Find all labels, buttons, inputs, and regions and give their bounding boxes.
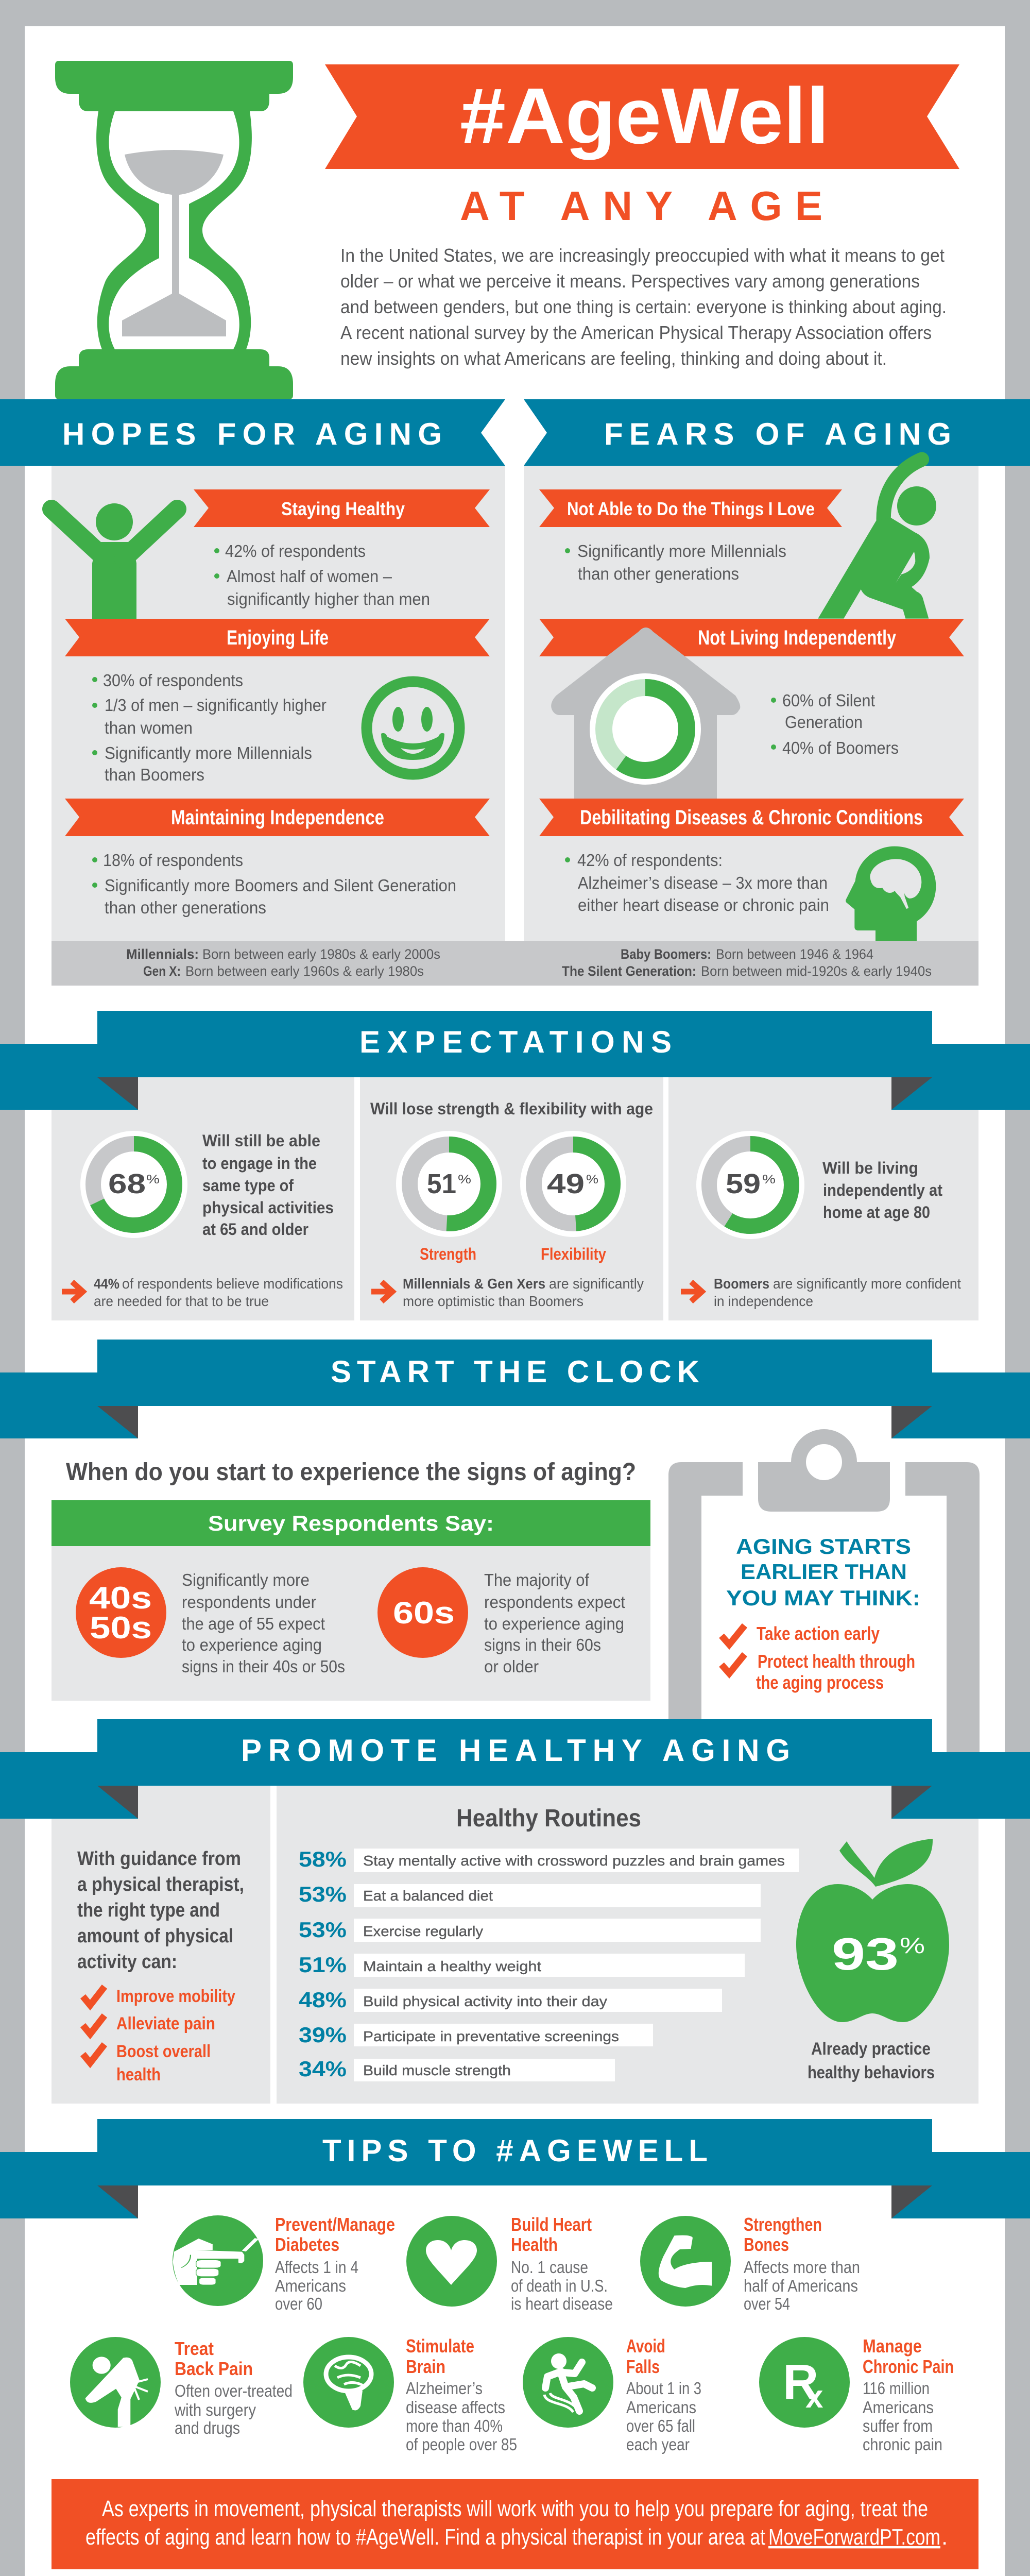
banner: fears of aging: FEARS OF AGING	[604, 417, 951, 451]
panel: expectations strength and flexibility: Millennials & Gen Xers	[403, 1276, 545, 1292]
call to action: MoveForwardPT.com	[768, 2524, 940, 2550]
survey panel: The majority of	[484, 1570, 590, 1589]
generation definitions strip: Born between early 1960s & early 1980s	[185, 963, 424, 979]
banner: start the clock	[0, 1340, 1030, 1438]
panel: physical therapist benefits: With guidance from	[77, 1848, 241, 1870]
intro paragraph: and between genders, but one thing is certain: everyone is thinking about aging.	[340, 296, 947, 317]
tip: strengthen bones: Affects more than	[744, 2258, 860, 2277]
panel: expectations 68%: at 65 and older	[202, 1220, 308, 1239]
tip: diabetes: Diabetes	[275, 2234, 339, 2255]
tip: manage chronic pain: x	[805, 2379, 823, 2415]
section: fear — not living independently: Not Living Independently	[698, 626, 897, 649]
tip: stimulate brain: Stimulate	[406, 2335, 474, 2357]
panel: physical therapist benefits: health	[116, 2065, 161, 2084]
tip: back pain	[70, 2337, 293, 2437]
panel: expectations 68%: are needed for that to be true	[94, 1293, 269, 1309]
section: fear — debilitating diseases: Debilitating Diseases & Chronic Conditions	[580, 806, 923, 829]
generation definitions strip	[52, 941, 978, 986]
panel: expectations 68%: %	[146, 1173, 160, 1187]
tip: back pain: with surgery	[174, 2400, 256, 2419]
section: hope — enjoying life: 30% of respondents	[103, 671, 243, 690]
panel: expectations strength and flexibility: Will lose strength & flexibility with age	[370, 1099, 653, 1118]
icon: hourglass	[55, 61, 293, 399]
tip: manage chronic pain: Chronic Pain	[863, 2356, 954, 2377]
clipboard callout: EARLIER THAN	[741, 1560, 907, 1584]
section: hope — maintaining independence	[65, 799, 490, 917]
tip: avoid falls	[523, 2335, 701, 2454]
call to action: effects of aging and learn how to #AgeWell. Find a physical therapist in your area at	[85, 2524, 765, 2550]
tip: strengthen bones: over 54	[744, 2294, 790, 2313]
panel: healthy routines bar chart: Stay mentally active with crossword puzzles and brain games	[363, 1853, 785, 1869]
section: fear — not able to do things	[539, 489, 842, 583]
tip: manage chronic pain: chronic pain	[863, 2435, 942, 2454]
generation definitions strip: The Silent Generation:	[562, 963, 696, 979]
banner: start the clock: START THE CLOCK	[331, 1354, 699, 1389]
banner: hopes for aging	[0, 399, 505, 466]
tip: avoid falls: each year	[626, 2435, 690, 2454]
section: hope — staying healthy: Staying Healthy	[281, 498, 405, 519]
panel: healthy routines bar chart: Maintain a healthy weight	[363, 1958, 541, 1974]
tip: manage chronic pain: 116 million	[863, 2379, 930, 2398]
panel: expectations 59%: %	[762, 1173, 776, 1187]
tip: stimulate brain: disease affects	[406, 2398, 505, 2417]
icon: apple 93%: %	[900, 1933, 925, 1958]
panel: physical therapist benefits: Boost overall	[116, 2042, 211, 2061]
panel: expectations strength and flexibility: %	[586, 1173, 598, 1187]
panel: healthy routines bar chart: 53%	[299, 1918, 347, 1942]
section: hope — maintaining independence: Significantly more Boomers and Silent Generation	[105, 876, 456, 895]
section: hope — enjoying life: than women	[105, 718, 193, 737]
banner: promote healthy aging	[0, 1719, 1030, 1819]
tip: strengthen bones: Bones	[744, 2234, 789, 2255]
banner: fears of aging	[524, 399, 1030, 466]
tip: avoid falls: Falls	[626, 2356, 660, 2377]
tip: diabetes: over 60	[275, 2294, 322, 2313]
tip: avoid falls: Avoid	[626, 2335, 665, 2357]
tip: manage chronic pain	[759, 2335, 954, 2454]
tip: stimulate brain: Alzheimer’s	[406, 2379, 483, 2398]
section: hope — maintaining independence: Maintaining Independence	[171, 806, 384, 829]
section: hope — enjoying life	[65, 619, 490, 784]
intro paragraph: A recent national survey by the American Physical Therapy Association offers	[340, 322, 932, 343]
panel: healthy routines bar chart: Healthy Routines	[456, 1805, 641, 1832]
generation definitions strip: Born between mid-1920s & early 1940s	[701, 963, 932, 979]
section: hope — staying healthy: significantly higher than men	[227, 589, 430, 608]
tip: stimulate brain: Brain	[406, 2356, 445, 2377]
generation definitions strip: Born between 1946 & 1964	[716, 946, 873, 962]
panel: healthy routines bar chart: Build muscle strength	[363, 2062, 511, 2078]
tip: avoid falls: over 65 fall	[626, 2416, 695, 2435]
survey panel: to experience aging	[484, 1614, 624, 1633]
panel: physical therapist benefits: Improve mobility	[116, 1987, 235, 2006]
panel: physical therapist benefits	[52, 1786, 270, 2104]
panel: expectations 68%: physical activities	[202, 1198, 334, 1217]
panel: expectations 59%: 59	[726, 1168, 761, 1199]
section: hope — staying healthy: 42% of respondents	[225, 541, 366, 561]
icon: apple 93%	[796, 1839, 949, 2022]
section: fear — not able to do things: Significantly more Millennials	[577, 541, 786, 561]
panel: expectations strength and flexibility: Strength	[420, 1245, 476, 1263]
title ribbon: #AgeWell	[325, 64, 959, 169]
panel: expectations 59%	[668, 1077, 978, 1320]
section: fear — not able to do things: Not Able to Do the Things I Love	[567, 498, 815, 519]
panel: physical therapist benefits: activity can:	[77, 1951, 177, 1973]
section: hope — staying healthy	[194, 489, 490, 608]
icon: smiley face	[367, 682, 459, 774]
subtitle: at any age: AT ANY AGE	[460, 183, 822, 229]
section: fear — not able to do things: than other generations	[578, 564, 739, 583]
survey panel	[52, 1500, 650, 1701]
title ribbon: #AgeWell: #AgeWell	[460, 72, 829, 160]
tip: heart health: Health	[511, 2234, 558, 2255]
panel: healthy routines bar chart	[277, 1786, 978, 2104]
tip: avoid falls: Americans	[626, 2398, 696, 2417]
panel: healthy routines bar chart: 48%	[299, 1988, 347, 2012]
intro paragraph: new insights on what Americans are feeling, thinking and doing about it.	[340, 348, 887, 369]
banner: promote healthy aging: PROMOTE HEALTHY AGING	[241, 1733, 790, 1768]
section: fear — not living independently: 60% of Silent	[782, 691, 875, 710]
panel: expectations 59%: home at age 80	[823, 1203, 930, 1222]
caption: already practice healthy behaviors: healthy behaviors	[808, 2063, 935, 2082]
survey panel: Survey Respondents Say:	[208, 1511, 494, 1535]
tip: heart health	[406, 2214, 613, 2313]
caption: already practice healthy behaviors	[808, 2039, 935, 2082]
section: hope — staying healthy: Almost half of women –	[227, 567, 392, 586]
panel: expectations 59%: Boomers	[714, 1276, 769, 1292]
panel: healthy routines bar chart: Build physical activity into their day	[363, 1993, 607, 2009]
panel: expectations 68%: 44%	[94, 1276, 119, 1292]
panel: healthy routines bar chart: 58%	[299, 1847, 347, 1871]
tip: heart health: Build Heart	[511, 2214, 592, 2235]
panel: expectations 59%: are significantly more confident	[773, 1276, 961, 1292]
panel: expectations strength and flexibility	[360, 1077, 663, 1320]
tip: diabetes	[173, 2214, 395, 2313]
section: hope — enjoying life: Significantly more Millennials	[105, 743, 312, 762]
clipboard callout: YOU MAY THINK:	[726, 1586, 920, 1610]
clipboard callout: the aging process	[756, 1672, 884, 1693]
icon: stretching person	[818, 460, 936, 619]
section: hope — enjoying life: Enjoying Life	[227, 626, 329, 649]
panel: healthy routines bar chart: Eat a balanced diet	[363, 1888, 493, 1904]
panel: expectations 68%	[52, 1077, 354, 1320]
section: fear — not living independently: 40% of Boomers	[782, 738, 899, 757]
tip: diabetes: Affects 1 in 4	[275, 2258, 358, 2277]
banner: tips to #agewell	[0, 2119, 1030, 2218]
section: fear — not living independently: Generation	[785, 713, 863, 732]
tip: diabetes: Prevent/Manage	[275, 2214, 395, 2235]
panel: healthy routines bar chart: Participate in preventative screenings	[363, 2028, 619, 2044]
tip: heart health: of death in U.S.	[511, 2276, 608, 2295]
icon: person with raised arms	[52, 503, 177, 619]
tip: back pain: Often over-treated	[175, 2381, 293, 2400]
panel: healthy routines bar chart: 53%	[299, 1882, 347, 1906]
icon: head with brain	[846, 846, 936, 941]
icon: house with 60% donut	[551, 628, 740, 799]
panel: expectations strength and flexibility: more optimistic than Boomers	[403, 1293, 583, 1309]
tip: manage chronic pain: R	[783, 2354, 818, 2410]
section: fear — debilitating diseases: either heart disease or chronic pain	[578, 895, 829, 914]
tip: heart health: No. 1 cause	[511, 2258, 588, 2277]
section: fear — not living independently	[539, 619, 964, 757]
caption: already practice healthy behaviors: Already practice	[811, 2039, 931, 2059]
icon: apple 93%: 93	[832, 1928, 899, 1979]
tip: diabetes: Americans	[275, 2276, 346, 2295]
panel: hopes for aging background	[52, 466, 505, 941]
call to action: .	[941, 2524, 948, 2550]
panel: fears of aging background	[524, 466, 978, 941]
survey panel: respondents under	[182, 1592, 316, 1612]
panel: healthy routines bar chart: Exercise regularly	[363, 1923, 483, 1939]
panel: expectations strength and flexibility: 49	[547, 1168, 585, 1199]
section: hope — enjoying life: 1/3 of men – significantly higher	[105, 696, 327, 715]
tip: avoid falls: About 1 in 3	[626, 2379, 701, 2398]
intro paragraph: older – or what we perceive it means. Perspectives vary among generations	[340, 270, 920, 292]
banner: expectations	[0, 1011, 1030, 1110]
survey panel: to experience aging	[182, 1635, 322, 1654]
call to action	[52, 2479, 978, 2569]
panel: healthy routines bar chart: 51%	[299, 1953, 347, 1977]
section: hope — maintaining independence: than other generations	[105, 898, 266, 917]
tip: manage chronic pain: suffer from	[863, 2416, 933, 2435]
survey panel: or older	[484, 1657, 539, 1676]
panel: expectations 59%: Will be living	[822, 1159, 918, 1177]
panel: expectations 68%: to engage in the	[202, 1154, 317, 1173]
generation definitions strip: Born between early 1980s & early 2000s	[202, 946, 440, 962]
tip: back pain: Back Pain	[175, 2358, 253, 2379]
panel: expectations 68%: Will still be able	[202, 1131, 320, 1150]
section: hope — enjoying life: than Boomers	[105, 765, 204, 784]
panel: healthy routines bar chart: 34%	[299, 2057, 347, 2081]
panel: expectations 68%: of respondents believe modifications	[122, 1276, 343, 1292]
panel: expectations 68%: 68	[108, 1168, 146, 1199]
panel: expectations 59%: in independence	[714, 1293, 813, 1309]
tip: heart health: is heart disease	[511, 2294, 613, 2313]
tip: manage chronic pain: Americans	[863, 2398, 934, 2417]
tip: strengthen bones	[640, 2214, 860, 2313]
tip: strengthen bones: Strengthen	[744, 2214, 822, 2235]
panel: expectations strength and flexibility: 51	[427, 1168, 456, 1199]
panel: expectations 68%: same type of	[202, 1176, 294, 1195]
generation definitions strip: Millennials:	[126, 946, 199, 962]
survey panel: 60s	[393, 1596, 455, 1630]
clipboard callout: Take action early	[757, 1623, 880, 1644]
panel: expectations strength and flexibility: Flexibility	[541, 1245, 606, 1263]
panel: physical therapist benefits: amount of physical	[77, 1925, 233, 1947]
panel: physical therapist benefits: Alleviate pain	[116, 2014, 215, 2033]
survey panel: 50s	[90, 1611, 152, 1645]
clipboard callout	[668, 1429, 980, 1762]
survey panel: respondents expect	[484, 1592, 625, 1612]
intro paragraph: In the United States, we are increasingly preoccupied with what it means to get	[340, 245, 945, 266]
survey panel: Significantly more	[182, 1570, 310, 1589]
banner: tips to #agewell: TIPS TO #AGEWELL	[322, 2133, 708, 2168]
tip: stimulate brain	[303, 2335, 517, 2454]
tip: back pain: and drugs	[175, 2418, 240, 2437]
survey panel: signs in their 40s or 50s	[182, 1657, 345, 1676]
tip: stimulate brain: more than 40%	[406, 2416, 503, 2435]
generation definitions strip: Gen X:	[143, 963, 181, 979]
tip: back pain: Treat	[175, 2338, 214, 2359]
section: hope — maintaining independence: 18% of respondents	[103, 851, 243, 870]
intro paragraph	[340, 245, 947, 369]
panel: expectations strength and flexibility: %	[458, 1173, 471, 1187]
panel: expectations 59%: independently at	[823, 1181, 942, 1199]
panel: physical therapist benefits: the right type and	[77, 1900, 220, 1921]
tip: stimulate brain: of people over 85	[406, 2435, 517, 2454]
generation definitions strip: Baby Boomers:	[621, 946, 711, 962]
survey panel: signs in their 60s	[484, 1635, 601, 1654]
survey panel: the age of 55 expect	[182, 1614, 325, 1633]
banner: expectations: EXPECTATIONS	[359, 1025, 672, 1059]
clipboard callout: AGING STARTS	[736, 1534, 911, 1558]
panel: healthy routines bar chart: 39%	[299, 2023, 347, 2047]
tip: strengthen bones: half of Americans	[744, 2276, 858, 2295]
panel: physical therapist benefits: a physical therapist,	[77, 1874, 244, 1895]
tip: manage chronic pain: Manage	[863, 2335, 922, 2357]
section: fear — debilitating diseases: 42% of respondents:	[577, 851, 723, 870]
panel: expectations strength and flexibility: are significantly	[549, 1276, 644, 1292]
banner: hopes for aging: HOPES FOR AGING	[62, 417, 442, 451]
question heading: When do you start to experience the signs of aging?	[66, 1459, 636, 1486]
section: fear — debilitating diseases	[539, 799, 964, 914]
clipboard callout: Protect health through	[758, 1651, 915, 1672]
survey panel: 40s	[89, 1581, 152, 1615]
section: fear — debilitating diseases: Alzheimer’s disease – 3x more than	[578, 873, 828, 892]
